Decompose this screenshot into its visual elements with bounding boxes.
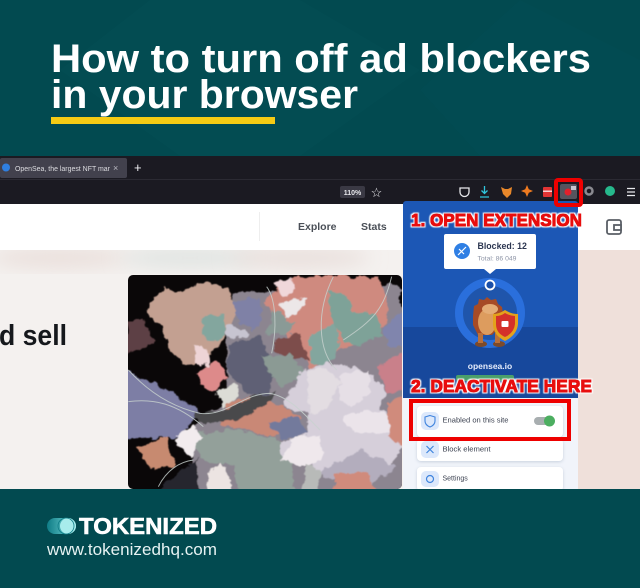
zoom level badge xyxy=(340,186,365,198)
new tab plus: + xyxy=(134,160,142,175)
menu item: enabled on this site xyxy=(417,406,563,437)
wordmark: TOKENIZED xyxy=(79,513,217,539)
blocked count: Blocked: 12 xyxy=(478,241,527,251)
highlight box: extension icon xyxy=(556,180,581,205)
nav: Stats: Stats xyxy=(361,221,387,233)
icon: settings xyxy=(421,471,439,487)
browser tab xyxy=(0,158,127,178)
menu item: enabled on this site: Enabled on this site xyxy=(442,418,509,424)
icon: spark extension xyxy=(521,185,533,197)
menu item: block element: Block element xyxy=(442,446,491,454)
footer background xyxy=(0,489,640,588)
icon: shield xyxy=(421,412,439,430)
icon: logo mark xyxy=(47,518,76,534)
icon: gear extension xyxy=(586,188,592,194)
popup menu area xyxy=(403,398,578,489)
callout: step 2: 2. DEACTIVATE HERE xyxy=(411,376,592,396)
icon: menu xyxy=(627,188,635,196)
title: How to turn off ad blockers xyxy=(51,37,591,81)
website navigation bar xyxy=(0,204,640,250)
NFT artwork xyxy=(123,275,410,497)
menu item: settings xyxy=(417,467,563,491)
blocked counter card xyxy=(444,234,536,274)
icon: green extension xyxy=(605,186,615,196)
callout: step 1: 1. OPEN EXTENSION xyxy=(411,210,582,230)
browser tab: × xyxy=(113,163,118,173)
browser tab: OpenSea, the largest NFT mar xyxy=(15,166,111,173)
icon: block cross xyxy=(421,441,439,458)
hero heading fragment: d sell xyxy=(0,320,67,352)
icon: ad blocker extension xyxy=(560,184,577,199)
icon: download xyxy=(480,186,489,197)
toggle switch on xyxy=(534,416,555,426)
extension popup xyxy=(403,201,578,491)
icon: pocket xyxy=(460,188,469,196)
mascot ring xyxy=(459,280,521,344)
header background xyxy=(0,0,640,156)
highlight box: toggle row xyxy=(411,401,569,439)
icon: bookmark star: ☆ xyxy=(371,185,382,200)
title: in your browser xyxy=(51,73,358,117)
icon: wallet xyxy=(607,220,621,234)
menu item: settings: Settings xyxy=(442,476,468,482)
menu item: block element xyxy=(417,439,563,461)
zoom level badge: 110% xyxy=(344,190,362,197)
nav: Explore: Explore xyxy=(298,221,337,233)
website hero background xyxy=(0,248,640,489)
browser chrome xyxy=(0,156,640,204)
website url: www.tokenizedhq.com xyxy=(46,541,217,559)
title underline xyxy=(51,117,275,124)
icon: fox extension xyxy=(501,187,512,198)
artwork flowing lines xyxy=(128,277,392,487)
total count: Total: 86 049 xyxy=(478,256,517,262)
green status fragment xyxy=(456,375,514,381)
logo xyxy=(47,513,217,539)
icon: blocked badge xyxy=(454,243,470,259)
icon: red extension xyxy=(543,187,552,197)
title xyxy=(51,37,591,117)
site name: opensea.io xyxy=(468,361,512,371)
icon: hedgehog with shield xyxy=(473,297,518,347)
